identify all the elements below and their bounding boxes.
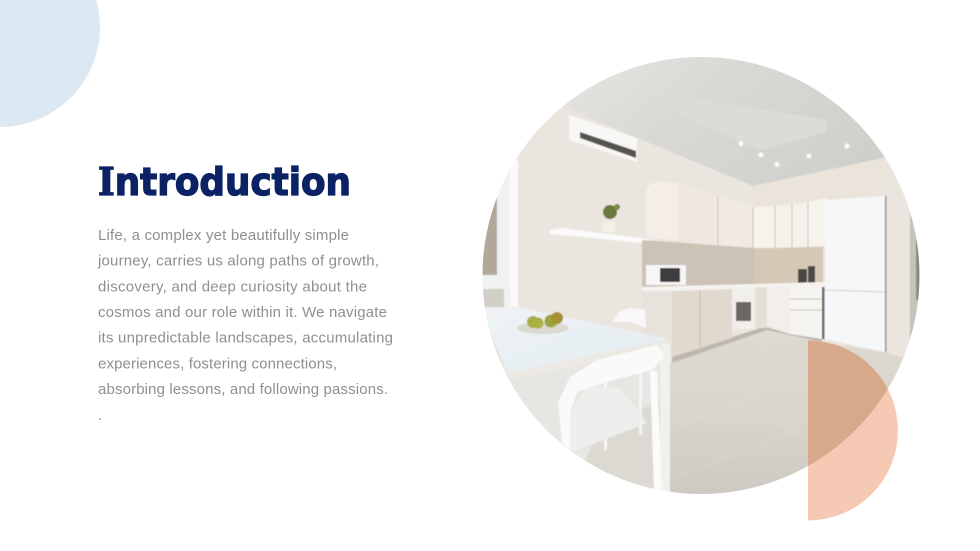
decorative blue circle, top left <box>0 0 100 127</box>
body paragraph: experiences, fostering connections, <box>98 355 337 372</box>
dining table top <box>484 306 668 373</box>
rear chair <box>612 308 646 328</box>
peach overlap with photo <box>808 340 888 466</box>
right upper wall <box>753 158 886 215</box>
backsplash <box>642 240 755 288</box>
circular kitchen photo <box>480 50 930 510</box>
body paragraph: its unpredictable landscapes, accumulating <box>98 330 393 347</box>
ceiling panel <box>790 119 827 141</box>
body paragraph: Life, a complex yet beautifully simple <box>98 227 349 244</box>
table side edge <box>508 339 670 380</box>
decorative peach half circle <box>808 340 898 520</box>
window glass top <box>482 197 497 275</box>
floor tile lines <box>670 350 880 510</box>
title: Introduction <box>98 159 351 204</box>
coffee machines <box>798 266 815 283</box>
air conditioner <box>569 115 637 162</box>
ceiling <box>564 57 885 186</box>
body paragraph: cosmos and our role within it. We navigate <box>98 304 387 321</box>
countertop <box>642 282 825 292</box>
table leg <box>660 344 670 494</box>
floor <box>670 330 903 494</box>
body paragraph: . <box>98 407 102 424</box>
body paragraph <box>97 227 393 424</box>
oven <box>732 288 755 329</box>
right pillar <box>885 150 925 358</box>
window glass lower <box>482 289 504 307</box>
wall shelf <box>550 228 654 243</box>
fridge <box>822 196 886 352</box>
body paragraph: journey, carries us along paths of growth, <box>97 253 379 270</box>
microwave <box>646 265 686 285</box>
shelf plant <box>603 204 620 232</box>
upper cabinets <box>646 182 827 248</box>
side window strip <box>910 215 918 340</box>
left window frame divider <box>510 160 518 306</box>
ceiling lights <box>738 141 850 167</box>
wall <box>490 106 886 380</box>
window dark edge <box>916 240 920 300</box>
panel under counter <box>642 291 657 292</box>
body paragraph: absorbing lessons, and following passions. <box>98 381 388 398</box>
left window frame <box>482 170 510 317</box>
floor kickboard <box>672 326 822 363</box>
fruit plate <box>517 312 569 334</box>
floor under the chair <box>585 400 660 488</box>
area below table <box>517 366 660 460</box>
front chair <box>558 345 664 490</box>
body paragraph: discovery, and deep curiosity about the <box>98 278 367 295</box>
lower cabinets <box>672 287 822 357</box>
